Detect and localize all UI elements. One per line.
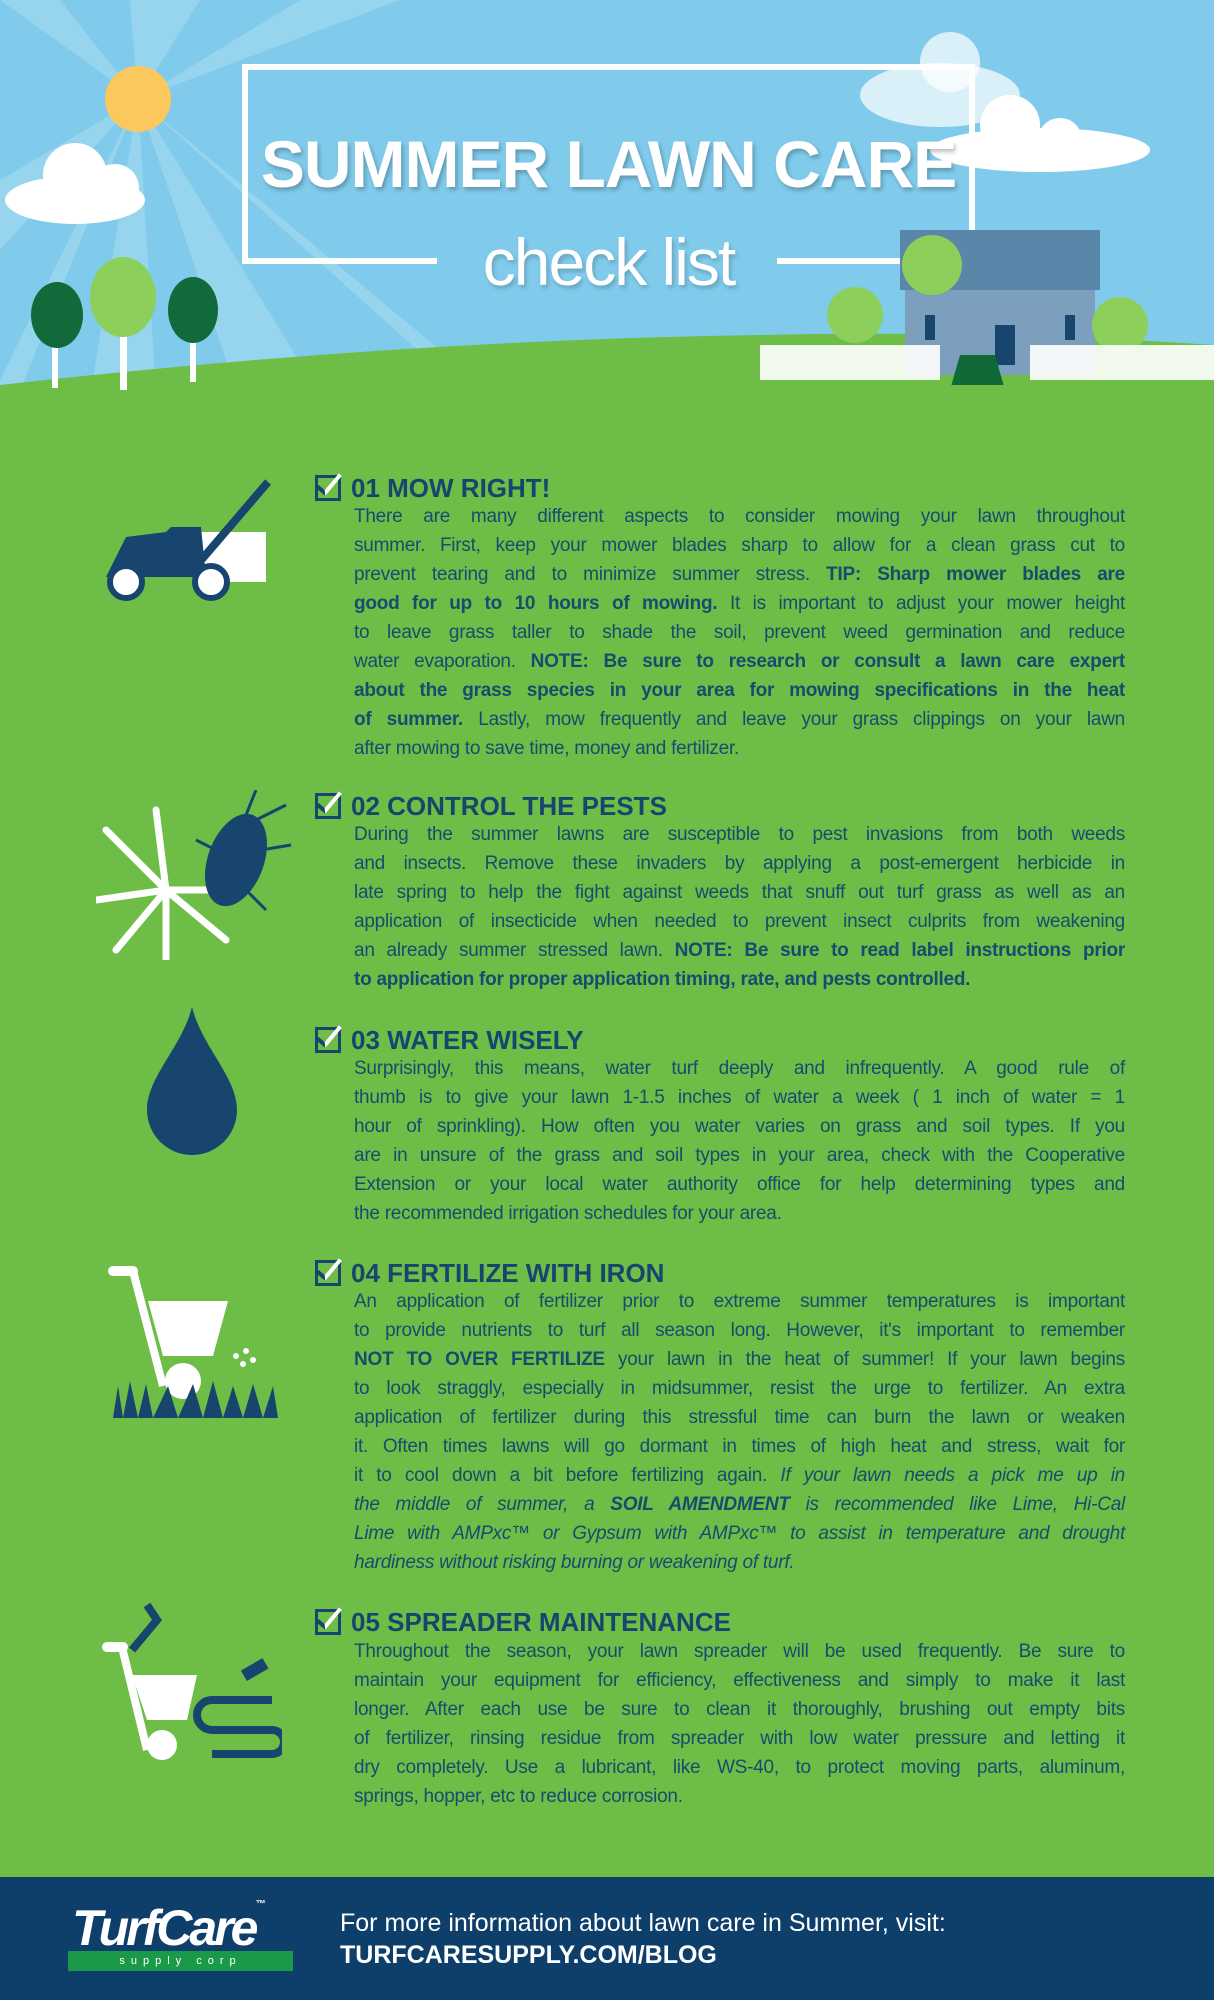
text: mow right: summer. First, keep your mower blades sharp to allow for a clean grass cut to [354,535,1125,556]
title text: SUMMER LAWN CARE [261,127,956,201]
text: spreader maintenance: of fertilizer, rinsing residue from spreader with low water pressure and letting it [354,1728,1125,1749]
text: pests [354,824,1125,990]
text: pests: to application for proper application timing, rate, and pests controlled. [354,969,970,990]
footer text: TURFCARESUPPLY.COM/BLOG [340,1941,717,1969]
text: spreader maintenance: maintain your equipment for efficiency, effectiveness and simply to make it last [354,1670,1125,1691]
text: water: Extension or your local water authority office for help determining types and [354,1174,1125,1195]
text: fertilize: it to cool down a bit before fertilizing again. If your lawn needs a pick me up in [354,1465,1125,1486]
text: fertilize: to look straggly, especially in midsummer, resist the urge to fertilizer. An extra [354,1378,1125,1399]
text: pests: application of insecticide when needed to prevent insect culprits from weakening [354,911,1125,932]
section 03: 03 WATER WISELY [351,1025,584,1055]
text: water: thumb is to give your lawn 1-1.5 inches of water a week ( 1 inch of water = 1 [354,1087,1125,1108]
icon: spreader with wrench and hose [102,1602,282,1760]
icon: water drop [147,1007,237,1155]
text: fertilize: to provide nutrients to turf all season long. However, it's important to remember [354,1320,1125,1341]
section 01: 01 MOW RIGHT! [351,473,550,503]
text: fertilize: application of fertilizer during this stressful time can burn the lawn or weaken [354,1407,1125,1428]
text: pests: late spring to help the fight against weeds that snuff out turf grass as well as an [354,882,1125,903]
text: mow right: after mowing to save time, money and fertilizer. [354,738,739,759]
text: spreader maintenance: longer. After each use be sure to clean it thoroughly, brushing out empty bits [354,1699,1125,1720]
text: fertilize [354,1291,1126,1573]
house [760,230,1214,385]
text: mow right: about the grass species in your area for mowing specifications in the heat [354,680,1125,701]
icon: spreader on grass [108,1266,278,1418]
sun [105,66,171,132]
text: fertilize: Lime with AMPxc™ or Gypsum with AMPxc™ to assist in temperature and drought [354,1523,1125,1544]
icon: weed and bug [96,790,292,960]
text: fertilize: hardiness without risking burning or weakening of turf. [354,1552,794,1573]
title box [242,64,975,299]
background scene [0,0,1214,385]
text: mow right: water evaporation. NOTE: Be sure to research or consult a lawn care expert [354,651,1125,672]
logo [68,1899,293,1971]
text: spreader maintenance: dry completely. Use a lubricant, like WS-40, to protect moving parts, aluminum, [354,1757,1125,1778]
text: fertilize: NOT TO OVER FERTILIZE your lawn in the heat of summer! If your lawn begins [354,1349,1125,1370]
section 04: 04 FERTILIZE WITH IRON [351,1258,664,1288]
footer text [340,1909,946,1969]
hill [0,334,1214,460]
subtitle: check list [483,225,734,299]
text: spreader maintenance [354,1641,1126,1807]
icon: lawn mower [106,480,271,601]
text: fertilize: it. Often times lawns will go dormant in times of high heat and stress, wait for [354,1436,1125,1457]
text: mow right: to leave grass taller to shade the soil, prevent weed germination and reduce [354,622,1125,643]
text: spreader maintenance: Throughout the season, your lawn spreader will be used frequently. Be sure to [354,1641,1125,1662]
text: spreader maintenance: springs, hopper, etc to reduce corrosion. [354,1786,683,1807]
text: mow right: good for up to 10 hours of mowing. It is important to adjust your mower height [354,593,1125,614]
text: water: the recommended irrigation schedules for your area. [354,1203,782,1224]
text: mow right: There are many different aspects to consider mowing your lawn throughout [354,506,1125,527]
clouds [5,32,1150,224]
text: pests: During the summer lawns are susceptible to pest invasions from both weeds [354,824,1125,845]
text: water [354,1058,1126,1224]
section 02: 02 CONTROL THE PESTS [351,791,667,821]
logo: TurfCare™ [72,1899,262,1956]
section 05: 05 SPREADER MAINTENANCE [351,1607,731,1637]
text: mow right [354,506,1126,759]
logo: supply corp [119,1955,242,1967]
text: fertilize: the middle of summer, a SOIL AMENDMENT is recommended like Lime, Hi-Cal [354,1494,1125,1515]
trees left [31,257,218,390]
text: water: Surprisingly, this means, water turf deeply and infrequently. A good rule of [354,1058,1125,1079]
text: mow right: prevent tearing and to minimize summer stress. TIP: Sharp mower blades are [354,564,1125,585]
footer text: For more information about lawn care in Summer, visit: [340,1909,946,1937]
text: water: hour of sprinkling). How often you water varies on grass and soil types. If you [354,1116,1125,1137]
text: pests: an already summer stressed lawn. NOTE: Be sure to read label instructions prior [354,940,1125,961]
footer [0,1877,1214,2000]
text: pests: and insects. Remove these invaders by applying a post-emergent herbicide in [354,853,1125,874]
text: fertilize: An application of fertilizer prior to extreme summer temperatures is important [354,1291,1125,1312]
text: water: are in unsure of the grass and soil types in your area, check with the Cooperative [354,1145,1125,1166]
text: mow right: of summer. Lastly, mow frequently and leave your grass clippings on your lawn [354,709,1125,730]
